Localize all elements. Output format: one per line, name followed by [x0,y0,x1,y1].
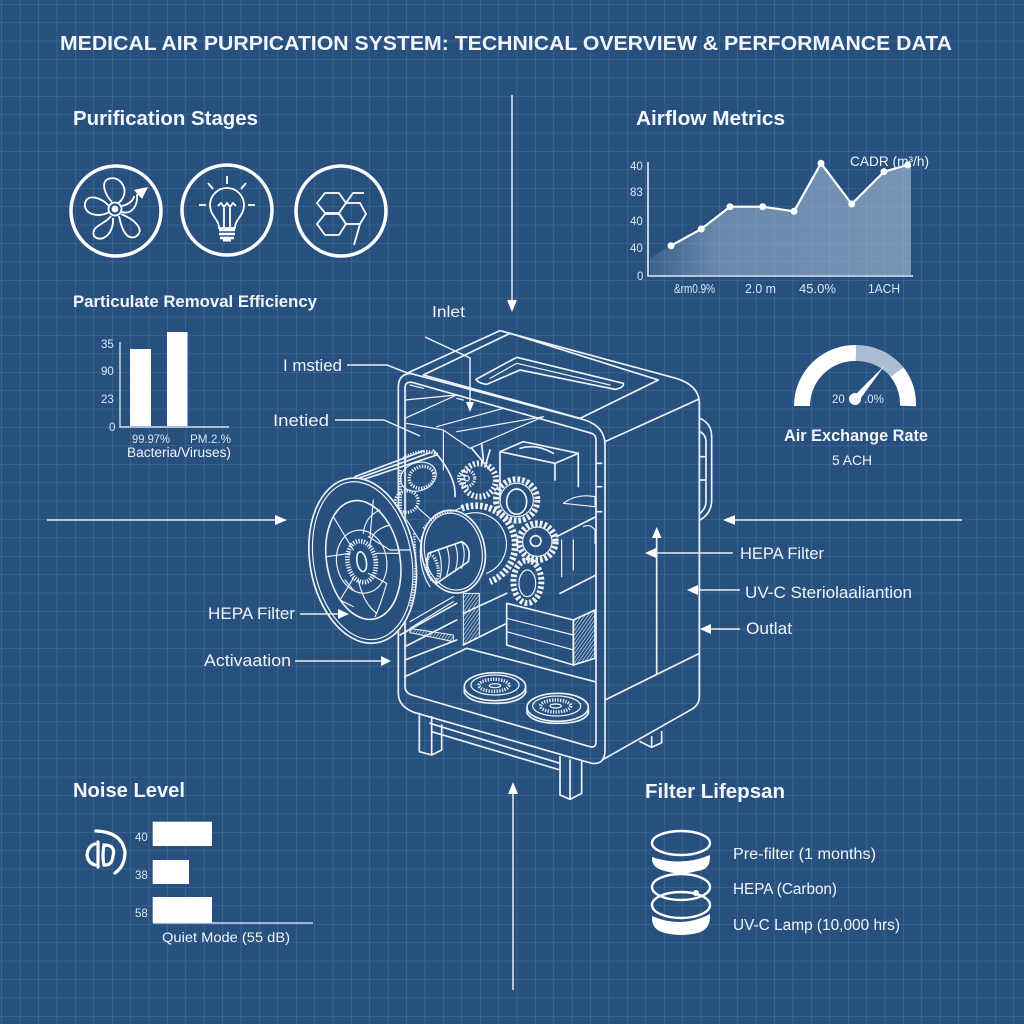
list: filter lifespan: Pre-filter (1 months) [733,846,876,863]
arrow: bottom airflow [508,782,518,990]
arrow: right airflow [723,515,962,525]
line chart: airflow: 2.0 m [745,281,776,296]
callout: lower left: Inetied [273,412,329,430]
bar chart: particulate removal: 90 [101,366,114,378]
arrow: left airflow [47,515,287,525]
callout: outlet [700,620,792,638]
bar chart: particulate removal: 0 [109,422,115,434]
gears [459,443,556,603]
bar chart: noise: Quiet Mode (55 dB) [162,929,290,945]
cabinet shell [398,331,712,799]
rear drum [415,505,492,598]
bar chart: particulate removal: Bacteria/Viruses) [127,445,231,460]
bar chart: noise: 58 [135,908,148,920]
heading: particulate removal: Particulate Removal Efficiency [73,293,318,311]
line chart: airflow: CADR (m³/h) [850,153,929,169]
bar chart: particulate removal [101,332,231,460]
line chart: airflow: 1ACH [868,281,900,296]
heading: airflow metrics: Airflow Metrics [636,108,785,130]
callout: activation [204,652,391,670]
bar chart: particulate removal: 99.97% [132,434,170,446]
bar chart: particulate removal: 35 [101,339,114,351]
bar chart: noise: 40 [135,832,148,844]
arrow: top airflow [507,95,517,312]
bar chart: particulate removal: PM.2.% [190,434,231,446]
gauge: air exchange: .0% [864,394,884,406]
label: air exchange rate [784,427,928,468]
line chart: airflow: 83 [630,187,643,199]
callout: upper left: I mstied [283,357,342,375]
callout: inlet [425,304,474,412]
internal shelves and frame [405,442,602,682]
list: filter lifespan: UV-C Lamp (10,000 hrs) [733,917,900,934]
bar chart: particulate removal: 23 [101,394,114,406]
callout: inlet: Inlet [432,304,466,321]
gauge: air exchange: 20 [832,394,845,406]
callout: activation: Activaation [204,652,291,670]
callout: upper left [283,357,410,375]
callout: lower left [273,412,420,436]
icon: filter stack [652,831,710,935]
bar chart: noise [135,822,313,945]
fan assembly [296,450,463,652]
icon: carbon stage [296,166,386,256]
callout: hepa filter left: HEPA Filter [208,605,296,623]
heading: filter lifespan: Filter Lifepsan [645,781,785,803]
filter block [410,593,595,665]
callout: outlet: Outlat [746,620,792,638]
bar chart: noise: 38 [135,870,148,882]
title: MEDICAL AIR PURPICATION SYSTEM: TECHNICAL OVERVIEW & PERFORMANCE DATA [60,32,952,55]
icon: UV lamp stage [182,165,272,255]
callout: hepa filter right [645,545,825,563]
icon: speaker [87,831,125,873]
callout: hepa filter left [208,605,349,623]
line chart: airflow: 40 [630,216,643,228]
heading: noise level: Noise Level [73,780,185,802]
device: purifier cutaway [296,331,712,799]
line chart: airflow: 40 [630,161,643,173]
gauge: air exchange [802,353,908,406]
label: air exchange rate: 5 ACH [832,452,872,468]
list: filter lifespan: HEPA (Carbon) [733,881,837,898]
heading: purification stages: Purification Stages [73,108,258,130]
bar: bacteria [130,349,151,426]
line chart: airflow: 40 [630,243,643,255]
arrow: internal upward flow [652,527,662,538]
line chart: airflow: 0 [637,271,643,283]
callout: hepa filter right: HEPA Filter [740,545,825,563]
label: air exchange rate: Air Exchange Rate [784,427,928,445]
line chart: airflow [630,153,929,296]
icon: fan stage [71,166,161,256]
line chart: airflow: 45.0% [799,281,836,296]
list: filter lifespan [733,846,900,934]
discs [464,673,588,723]
callout: uv-c: UV-C Steriolaaliantion [745,584,912,602]
line chart: airflow: &rm0.9% [674,281,715,296]
